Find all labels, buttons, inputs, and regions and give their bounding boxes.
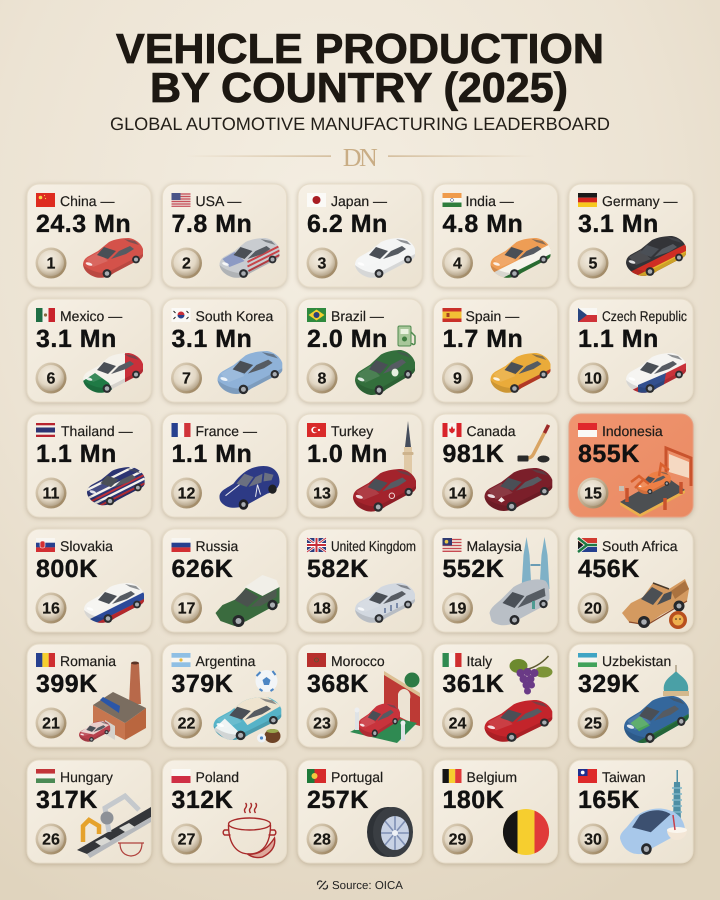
- flag: China: [36, 193, 55, 207]
- car: blue: [218, 351, 282, 394]
- card: Uzbekistan: [569, 644, 693, 755]
- name: Malaysia: [466, 538, 522, 554]
- rank medal: 20: [584, 600, 602, 618]
- flag: Morocco: [307, 653, 326, 667]
- car: Slovakia flag: [84, 583, 144, 623]
- value: 24.3 Mn: [36, 210, 131, 238]
- car: red sports: [484, 700, 552, 742]
- card: Slovakia: [27, 529, 151, 633]
- name: USA —: [196, 193, 241, 209]
- name: South Africa: [602, 538, 678, 554]
- flag: Russia: [172, 538, 190, 552]
- rank medal: 12: [178, 486, 196, 502]
- card: Russia: [162, 529, 286, 632]
- value: 399K: [36, 670, 98, 698]
- value: 257K: [307, 786, 369, 814]
- card: USA: [162, 184, 286, 287]
- value: 312K: [172, 786, 233, 814]
- flag: France: [172, 423, 190, 437]
- flag: Taiwan: [578, 769, 597, 783]
- name: Uzbekistan: [602, 653, 671, 669]
- rank medal: 1: [47, 256, 56, 272]
- flag: Portugal: [307, 769, 326, 783]
- name: Spain —: [466, 308, 519, 324]
- value: 1.1 Mn: [578, 325, 659, 353]
- flag: Italy: [442, 653, 462, 667]
- icon: hockey stick and puck: [518, 425, 550, 462]
- name: Argentina: [196, 653, 256, 669]
- value: 1.1 Mn: [36, 440, 117, 468]
- flag: Indonesia: [578, 423, 597, 437]
- flag: Belgium: [442, 769, 462, 783]
- flag: Japan: [307, 193, 326, 207]
- rank medal: 7: [182, 370, 191, 388]
- name: Slovakia: [60, 538, 113, 554]
- car: white: [355, 238, 415, 278]
- name: France —: [196, 423, 257, 439]
- rank medal: 14: [449, 486, 466, 502]
- value: 582K: [307, 555, 369, 583]
- icon: football: [256, 670, 278, 692]
- card: China: [27, 184, 151, 287]
- card: Portugal: [298, 760, 422, 863]
- value: 6.2 Mn: [307, 210, 388, 238]
- value: 552K: [442, 555, 504, 583]
- rank medal: 17: [178, 600, 196, 618]
- icon: fuel pump: [398, 326, 415, 346]
- car: red: [83, 238, 143, 278]
- card: South Korea: [162, 299, 286, 402]
- name: Italy: [466, 653, 492, 669]
- car: Thailand flag: [87, 467, 145, 506]
- value: 180K: [442, 786, 504, 814]
- name: China —: [60, 193, 114, 209]
- flag: Canada: [442, 423, 462, 437]
- card: Argentina: [162, 644, 286, 747]
- car: green SUV: [216, 575, 280, 627]
- card: India: [434, 184, 558, 288]
- icon: Taipei 101 tower: [672, 770, 682, 822]
- value: 2.0 Mn: [307, 325, 388, 353]
- rank medal: 28: [313, 832, 331, 848]
- icon: arch, mat, workers and car: [350, 671, 420, 743]
- flag: Argentina: [172, 653, 190, 667]
- card: Hungary: [27, 760, 151, 863]
- value: 379K: [172, 670, 233, 698]
- card: Taiwan: [569, 760, 693, 863]
- icon: dome: [663, 665, 689, 696]
- icon: pot with chili: [223, 803, 276, 858]
- rank medal: 10: [584, 370, 602, 388]
- value: 626K: [172, 555, 233, 583]
- value: 855K: [578, 440, 640, 468]
- car: silver: [355, 583, 415, 623]
- value: 361K: [442, 670, 504, 698]
- value: 4.8 Mn: [442, 210, 523, 238]
- icon: mate gourd and small ball: [257, 729, 280, 743]
- flag: Malaysia: [442, 538, 462, 552]
- car: blue and green: [624, 696, 689, 744]
- icon: conveyor and robots: [77, 796, 151, 858]
- card: Malaysia: [434, 529, 558, 632]
- value: 329K: [578, 670, 640, 698]
- icon: grapes: [510, 656, 552, 694]
- value: 800K: [36, 555, 98, 583]
- value: 3.1 Mn: [172, 325, 252, 353]
- card: Canada: [434, 414, 558, 517]
- rank medal: 27: [178, 832, 196, 848]
- flag: Uzbekistan: [578, 653, 597, 667]
- value: 165K: [578, 786, 640, 814]
- card: Poland: [162, 760, 286, 863]
- rank medal: 11: [43, 486, 60, 502]
- rank medal: 18: [313, 600, 331, 618]
- name: Morocco: [331, 653, 385, 669]
- name: Belgium: [466, 769, 517, 785]
- value: 368K: [307, 670, 369, 698]
- icon: bubble tea: [667, 815, 687, 840]
- card: Belgium: [434, 760, 558, 863]
- icon: factory and car: [79, 662, 146, 742]
- title: BY COUNTRY (2025): [150, 64, 568, 111]
- card: Romania: [27, 644, 151, 747]
- value: 456K: [578, 555, 640, 583]
- flag: Spain: [442, 308, 462, 322]
- value: 3.1 Mn: [578, 210, 659, 238]
- flag: United Kingdom: [307, 538, 326, 552]
- car: light blue EV: [620, 808, 685, 855]
- flag: Romania: [36, 653, 55, 667]
- rank medal: 2: [182, 256, 191, 272]
- rank medal: 22: [178, 716, 196, 732]
- name: Germany —: [602, 193, 677, 209]
- rank medal: 21: [42, 716, 60, 732]
- icon: minaret: [402, 421, 414, 475]
- rank medal: 24: [449, 716, 466, 732]
- rank medal: 3: [318, 256, 327, 272]
- name: Taiwan: [602, 769, 646, 785]
- icon: Petronas towers: [522, 537, 550, 589]
- flag: Poland: [172, 769, 190, 783]
- card: Indonesia: [569, 414, 693, 517]
- rank medal: 9: [453, 370, 462, 388]
- title: [116, 25, 604, 111]
- rank medal: 8: [318, 370, 327, 388]
- flag: Germany: [578, 193, 597, 207]
- card: Germany: [569, 184, 693, 287]
- flag: Czech Republic: [578, 308, 597, 322]
- icon: assembly line: [619, 448, 691, 517]
- car: dark red: [353, 469, 416, 512]
- card: Italy: [434, 644, 558, 747]
- rank medal: 16: [42, 600, 60, 618]
- card: Czech Republic: [569, 299, 693, 403]
- car: silver MPV: [490, 579, 550, 625]
- car: teal classic: [214, 695, 281, 742]
- flag: Hungary: [36, 769, 55, 783]
- name: Hungary: [60, 769, 113, 785]
- card: Japan: [298, 184, 422, 287]
- flag: Thailand: [36, 423, 55, 437]
- rank medal: 30: [584, 832, 602, 848]
- name: Thailand —: [61, 423, 133, 439]
- flag: South Africa: [578, 538, 597, 552]
- name: Turkey: [331, 423, 373, 439]
- name: Indonesia: [602, 423, 663, 439]
- icon: tire: [367, 807, 413, 857]
- rank medal: 26: [42, 832, 60, 848]
- value: 7.8 Mn: [172, 210, 252, 238]
- name: Mexico —: [60, 308, 122, 324]
- name: Portugal: [331, 769, 383, 785]
- name: United Kingdom: [331, 538, 416, 554]
- name: Brazil —: [331, 308, 384, 324]
- card: Morocco: [298, 644, 422, 747]
- source: Source: OICA: [332, 880, 403, 892]
- rank medal: 4: [453, 256, 462, 272]
- car: Germany flag: [626, 236, 686, 276]
- card: Spain: [434, 299, 558, 403]
- rank medal: 19: [449, 600, 466, 618]
- card: Thailand: [27, 414, 151, 517]
- flag: South Korea: [172, 308, 190, 322]
- name: Czech Republic: [602, 308, 687, 324]
- car: Mexico flag: [83, 353, 145, 395]
- value: 3.1 Mn: [36, 325, 117, 353]
- flag: Brazil: [307, 308, 326, 322]
- car: blue beetle: [220, 466, 280, 510]
- card: United Kingdom: [298, 529, 422, 632]
- rank medal: 15: [584, 486, 602, 502]
- flag: India: [442, 193, 462, 207]
- rank medal: 6: [47, 370, 56, 388]
- rank medal: 5: [589, 256, 598, 272]
- car: Czech flag: [626, 353, 686, 393]
- name: Japan —: [331, 193, 387, 209]
- name: Russia: [196, 538, 239, 554]
- flag: Mexico: [36, 308, 55, 322]
- car: USA flag: [220, 238, 280, 278]
- title: VEHICLE PRODUCTION: [116, 25, 604, 72]
- rank medal: 29: [449, 832, 466, 848]
- car: tan pickup: [622, 579, 689, 628]
- card: South Africa: [569, 529, 693, 632]
- icon: Belgian flag disc: [503, 809, 549, 855]
- card: France: [162, 414, 286, 517]
- subtitle: GLOBAL AUTOMOTIVE MANUFACTURING LEADERBOARD: [110, 114, 610, 134]
- name: India —: [466, 193, 514, 209]
- icon: lion: [669, 611, 687, 629]
- car: green hatch: [355, 350, 415, 395]
- car: maroon: [484, 468, 552, 511]
- card: Turkey: [298, 414, 422, 517]
- logo divider: DN: [343, 143, 378, 172]
- name: South Korea: [196, 308, 274, 324]
- flag: Slovakia: [36, 538, 55, 552]
- value: 317K: [36, 786, 98, 814]
- rank medal: 23: [313, 716, 331, 732]
- value: 1.0 Mn: [307, 440, 388, 468]
- name: Romania: [60, 653, 116, 669]
- car: India flag: [490, 238, 550, 278]
- name: Canada: [466, 423, 516, 439]
- rank medal: 25: [584, 716, 602, 732]
- rank medal: 13: [313, 486, 331, 502]
- value: 981K: [442, 440, 504, 468]
- flag: Turkey: [307, 423, 326, 437]
- value: 1.7 Mn: [442, 325, 523, 353]
- card: Brazil: [298, 299, 422, 402]
- flag: USA: [172, 193, 190, 207]
- card: Mexico: [27, 299, 151, 402]
- car: yellow: [490, 353, 550, 393]
- value: 1.1 Mn: [172, 440, 252, 468]
- name: Poland: [196, 769, 239, 785]
